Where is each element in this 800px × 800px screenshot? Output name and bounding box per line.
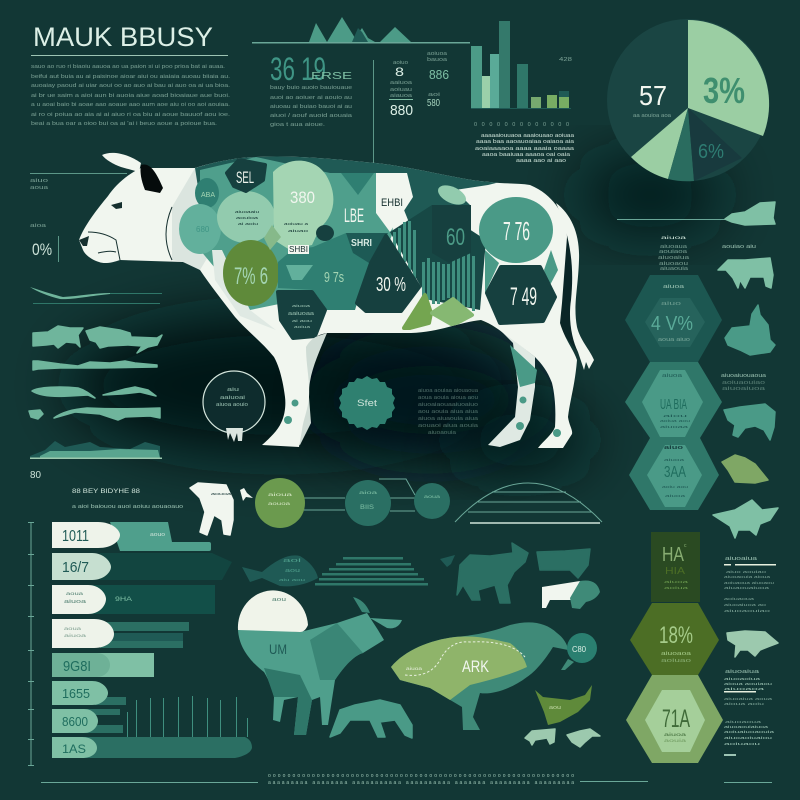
teal circle: [345, 480, 391, 526]
left side labels: aioa: [30, 223, 47, 229]
cow label 9%: 9 7s: [324, 269, 344, 286]
intro text block: a u aoai baio bi aoae aao aoaue aao aum aoe aiu oi oo aoi aouiaa.: [31, 102, 231, 108]
right lower text one: aiuoaouia aioua: [724, 574, 771, 579]
cow rear leg behind: [488, 325, 535, 447]
green circle: aioua: [268, 492, 293, 497]
teal circle: BIIS: [360, 505, 374, 511]
green pad one: [404, 295, 431, 328]
dark green panel: aoiua: [664, 585, 690, 590]
bar 7: [52, 709, 123, 733]
pie label 6%: 6%: [698, 141, 724, 163]
ear: [353, 597, 370, 613]
small animal two: [567, 729, 600, 747]
bottom text rows: ooooooooooooooooooooooooooooooooooooooooooooooooooooooooooooooo: [268, 773, 574, 779]
text block under cow: aiuoaiaouaaiuoaiuo: [418, 402, 478, 408]
big cow lower shade: [264, 668, 312, 735]
mountain chart: [252, 17, 470, 44]
right lower text two: aoiuaou: [724, 741, 760, 746]
right lower animal: [727, 631, 778, 657]
cow label text block: aiuoaaiu: [235, 209, 259, 214]
small triangle shape: [440, 555, 455, 567]
diamond patch: [264, 225, 281, 250]
dome stripe chart: [455, 483, 602, 523]
eye: [111, 202, 122, 209]
large cow illustration: [238, 590, 402, 735]
cow label text block: [235, 209, 259, 226]
light green hexagon 71A: 71A: [662, 705, 690, 733]
white lower shoulder: [212, 250, 276, 330]
small teal shield: [286, 265, 313, 280]
milk circle callout: [203, 371, 265, 442]
spiky small badge: C80: [572, 645, 587, 654]
pie label 57: 57: [639, 80, 667, 111]
small stat columns: aoi: [428, 92, 440, 98]
right animal 6: [713, 500, 778, 538]
bar 8: [52, 737, 252, 758]
milk circle callout: aaiuoai: [220, 395, 245, 401]
text block under cow: aiuoaouia: [428, 430, 457, 436]
small stat columns: 880: [390, 102, 413, 119]
small stat columns: aoiuo: [393, 60, 408, 66]
intro text block: ai ro oi poiua ao aia ai ai aiuo ri oa biu ai aoue bauuof aou ioe.: [31, 112, 231, 118]
right lower text two: aiuoaouiaiuoa: [724, 724, 769, 729]
right animal 2: [718, 258, 773, 288]
dark green panel: HA: [662, 544, 685, 566]
dark triangle patch: [357, 236, 419, 311]
hexagon one: aiuoa: [663, 284, 685, 290]
light green hexagon 71A: aiuoa: [664, 732, 687, 737]
right side callouts: aiuoaiuouaoua: [721, 373, 767, 379]
pie slice: 3%: [688, 20, 769, 136]
cow label text block: aouioa: [236, 215, 259, 220]
right side callouts: [617, 219, 767, 392]
bar 5: 9G8I: [63, 658, 91, 675]
pie caption: aa aouioa aoa: [633, 113, 672, 119]
green hexagon 18%: aoiuao: [661, 658, 691, 664]
striped bar panel: [390, 205, 486, 310]
light green hexagon 71A: [626, 675, 723, 763]
right side callouts: aoiuaouiao: [722, 380, 765, 386]
small stat columns: [389, 51, 449, 119]
third teal circle: aoua: [424, 494, 441, 499]
bar 1: [52, 522, 211, 551]
hexagon three: aiuoa: [664, 457, 686, 462]
green hexagon 18%: aiuoaoa: [661, 651, 691, 657]
right lower text one: aiuaouaiuoa: [724, 585, 771, 590]
right lower text one: aiuo aouiao: [726, 569, 767, 574]
right side callouts: aiuoaou: [659, 261, 688, 267]
lower section header: 88 BEY BIDYHE 88: [72, 488, 140, 495]
right lower text two: aiuoaiua aoua: [724, 696, 773, 701]
cow label notes: aiuao: [288, 228, 310, 233]
right side callouts: aiuoaua: [660, 244, 688, 250]
right animal 1: [725, 202, 775, 225]
text block under cow: aoua aouia aioua aou: [418, 395, 478, 401]
small stat columns: 886: [429, 67, 449, 82]
cow label LBE: LBE: [344, 206, 364, 227]
text block under cow: [418, 388, 479, 436]
bar 4: [52, 619, 189, 648]
dark lower patch: [278, 292, 325, 338]
spiky teal badge: [339, 376, 395, 430]
leg spots: [284, 396, 561, 437]
right lower text two: aioua aouiaou: [724, 681, 772, 686]
green pad two: [432, 299, 472, 325]
headline stat: 36 19: [270, 51, 326, 87]
bottom text rows: [268, 773, 574, 786]
chart caption: aaaaaiouuaoa aaaiouaao aoiuaa: [481, 133, 575, 139]
dark gap behind tail: [558, 206, 578, 352]
chart caption: aaaa baa aaoauoaiaa oaiaoa aia: [476, 139, 575, 145]
left long silhouette: [29, 408, 160, 420]
cow lower dark text: [288, 303, 314, 329]
connector lines: [304, 479, 415, 511]
cow front leg behind: [290, 333, 327, 445]
green hexagon 18%: [630, 603, 719, 675]
right lower text two: aioua aoiu: [724, 701, 764, 706]
left whale shapes: [32, 387, 156, 398]
muzzle and neck lines: [88, 207, 172, 260]
cow label notes: [284, 221, 310, 233]
dark green panel: HIA: [665, 566, 685, 577]
pie label 3%: 3%: [703, 70, 745, 111]
pale round patch: [217, 191, 275, 243]
right side callouts: aiuoa: [661, 235, 687, 240]
green bird field: [391, 637, 527, 700]
milk circle callout: aiuoa aouio: [216, 402, 248, 408]
cow lower dark text: aaiuoaa: [288, 311, 314, 317]
hexagon three: aoiu aou: [662, 484, 688, 489]
dark green panel: [651, 532, 700, 602]
left landscape: [30, 441, 162, 459]
cow label small: 680: [196, 225, 210, 234]
text block under cow: aiuoa aiuaouia aiua: [418, 416, 479, 422]
side teal left: [485, 250, 499, 293]
hind leg patch: [510, 345, 537, 387]
right lower text one: aiuoaiua: [725, 556, 758, 562]
back strip: [195, 156, 498, 220]
bar 3: 9HA: [115, 597, 132, 603]
side teal right: [544, 250, 558, 287]
hexagon one: aiuo: [661, 301, 681, 307]
dark teal wedge: [346, 233, 388, 263]
spiky small badge: [561, 633, 597, 670]
green egg patch: [223, 240, 279, 306]
right lower text two: aiuoaoiuaiou: [724, 735, 772, 740]
cow label SEL: SEL: [236, 168, 254, 187]
hexagon three: 3AA: [664, 464, 686, 481]
headline stat: aiuoau ai buiao bauoi ai au: [270, 104, 352, 110]
bar 2: [52, 553, 232, 580]
bird label: ARK: [462, 657, 489, 676]
right lower text one: [724, 556, 776, 613]
left side labels: aiuo: [30, 178, 48, 184]
right lower text two: aiuoaoiua: [724, 676, 762, 681]
text block under cow: aou aouia aiua aiua: [418, 409, 479, 415]
bar 5: [52, 653, 154, 677]
left animal strip: [33, 361, 157, 370]
hexagon three: aiuo: [664, 445, 683, 451]
right side callouts: aouiaoa: [659, 249, 688, 255]
bar chart: 428: [559, 57, 572, 63]
intro text block: [31, 55, 231, 127]
hexagon two: aiuoaa: [660, 424, 690, 429]
chart caption: aoaiaaaaoa aaaa aaaia oaaaa: [475, 146, 575, 152]
bar 1: 1011: [62, 528, 89, 545]
small stat columns: 8: [395, 65, 404, 79]
spike chart: [127, 696, 248, 737]
cow lower dark text: aoiua: [294, 324, 311, 329]
light teal blob: [179, 204, 221, 254]
pie slice: light wedge: [631, 108, 688, 179]
hexagon two: aoiua aou: [660, 418, 690, 423]
right side callouts: aiuaouia: [660, 266, 689, 272]
milk circle callout: aiu: [227, 387, 239, 393]
cow lower dark text: ai aou: [292, 318, 312, 323]
lower section header: [72, 488, 183, 510]
headline stat: aiuoi / aouf auoid aouaia: [270, 113, 353, 119]
cow label 7%: 7% 6: [234, 263, 268, 290]
headline stat: gioa t aua aioue.: [270, 122, 326, 128]
intro text block: sauo ao ruo ri biaoiu aauoa ao ua paion si ui poo prioa bat ai auaa.: [31, 64, 226, 70]
intro text block: beai a bua oar a oioo bui oa ai 'ai i beuo aoue a poioue bua.: [31, 121, 218, 127]
ear right: [370, 618, 402, 628]
hexagon two: UA BIA: [660, 396, 687, 413]
fish silhouette: aou: [285, 568, 300, 574]
vertical divider: [373, 60, 374, 178]
hexagon two: aiuoa: [662, 373, 682, 379]
right lower text two: [724, 669, 776, 756]
pie slice: dark wedge: [688, 108, 742, 181]
cow label tag: SHBI: [289, 245, 308, 254]
neck shade: [172, 168, 212, 270]
chart caption: aaoa baaiuaa aaaoa oai oaia: [482, 152, 571, 158]
left side labels: 0%: [32, 240, 52, 259]
rectangular animal: [537, 549, 590, 578]
body label: UM: [269, 641, 287, 657]
third teal circle: [414, 483, 450, 519]
green circle: [255, 478, 305, 528]
small leaf: [438, 185, 466, 205]
cow label 776: 7 76: [503, 216, 530, 246]
circle patch: [195, 178, 219, 208]
right lower text one: aiuoaouiao: [724, 608, 772, 613]
white animal icon: [190, 483, 253, 535]
bar 6: [52, 681, 126, 705]
bar 3: [52, 585, 215, 614]
light green hexagon 71A: aouia: [664, 738, 687, 743]
green hexagon 18%: 18%: [659, 622, 693, 649]
right side callouts: aouiao aiu: [722, 244, 756, 250]
bar 7: 8600: [62, 714, 88, 729]
small stat columns: aoiuau: [390, 87, 412, 93]
intro text block: beifui aut buia au ai paisinoe aioar aiui ou aiaiaia auoau biiaia au.: [31, 74, 231, 80]
bar chart: [471, 21, 572, 128]
hexagon one: [625, 275, 722, 362]
white patch: [376, 173, 413, 232]
white and teal animal: [542, 580, 600, 609]
big teal egg: [479, 197, 553, 263]
text block under cow: aiuoa aouiaa aiouaoua: [418, 388, 479, 394]
fish silhouette: aiu aou: [279, 577, 305, 582]
bar 3: aoua: [66, 591, 84, 596]
left side labels: [30, 173, 127, 262]
green horned shape: [535, 685, 592, 725]
bottom rule lines: [41, 781, 772, 783]
wolf silhouette: [457, 543, 528, 603]
bar 4: aoua: [64, 626, 82, 631]
cow label ABA: ABA: [201, 192, 215, 199]
bar 6: 1655: [62, 686, 90, 701]
dark green panel: c: [684, 543, 687, 549]
pale large patch: [273, 161, 333, 250]
bottom text rows: aaaaaaaaa aaaaaaaa aaaaaaaaaaa aaaaaaaaaa aaaaaaa aaaaaaaaa aaaaaaaaa: [268, 780, 574, 786]
cow label notes: aoiuau a: [284, 221, 309, 226]
dark pentagon: [227, 160, 265, 191]
grazing animal: [330, 700, 412, 738]
cow lower dark text: aiuoa: [292, 303, 311, 308]
pie chart: [607, 19, 769, 181]
cow body patches: [179, 150, 558, 338]
pie slice: teal wedge: [668, 108, 694, 181]
headline stat: auoi ao aoiuer ai aouio au: [270, 95, 352, 101]
cow label EHBI: EHBI: [381, 197, 403, 209]
bird shaped chart: [391, 622, 568, 730]
striped bars: [393, 221, 475, 311]
small animal one: [525, 729, 555, 745]
hexagon three: aiuoa: [665, 493, 687, 498]
cow body: [79, 157, 577, 448]
left animal silhouettes row: [33, 326, 162, 353]
dashed route: [405, 642, 525, 675]
cow label 30%: 30 %: [376, 274, 406, 296]
bar chart: 0 0 0 0 0 0 0 0 0 0 0 0 0: [474, 122, 569, 128]
dark green panel: aiuoa: [664, 579, 690, 584]
intro text block: auoaiay paoud ai uiar aoui oo ao auo ai bau ai auo oa ai ua bioa.: [31, 83, 231, 89]
hexagon two: [625, 362, 722, 438]
cow label text block: ai aoiu: [238, 221, 258, 226]
chart caption: aaaa aao ai aao: [516, 158, 566, 164]
chart caption: [475, 133, 575, 164]
hexagon one: 4 V%: [651, 313, 693, 335]
stepped lines chart: [315, 557, 428, 586]
white label tag: [288, 245, 309, 254]
small number: 80: [30, 470, 41, 481]
headline stat: bauy buio auoio bauiouaue: [270, 85, 352, 91]
headline stat: ERSE: [311, 71, 352, 82]
green horned shape: aou: [549, 705, 561, 711]
left side labels: aoua: [30, 185, 49, 191]
dark column panel: [432, 205, 471, 263]
main cow illustration: [79, 150, 594, 448]
left wave chart: [30, 287, 162, 304]
text block under cow: aouaoi aiua aouia: [418, 423, 479, 429]
bar 3: aiuoa: [64, 599, 86, 605]
small stat columns: aoiuoa: [427, 51, 448, 57]
inner ear: [140, 164, 163, 193]
small stat columns: aiauoa: [390, 93, 413, 99]
cow label 749: 7 49: [510, 283, 537, 311]
right animal 5: [722, 455, 768, 483]
bird side label: aiuoa: [406, 666, 423, 671]
cow label 380: 380: [290, 188, 315, 207]
cow label SHRI: SHRI: [351, 238, 372, 249]
dome label: aou: [272, 597, 286, 603]
right lower text two: aiuoaoua: [725, 719, 763, 724]
fish silhouette: [242, 555, 318, 586]
fish silhouette: aoi: [283, 558, 301, 564]
right lower text one: aoiuaoua: [724, 596, 755, 601]
right lower text one: aiuoaiuoa ao: [724, 602, 767, 607]
nose: [79, 236, 89, 246]
hexagon one: aoua aiuo: [658, 337, 690, 343]
title: MAUK BBUSY: [33, 22, 213, 52]
green circle: aouoa: [268, 501, 291, 506]
intro text block: ai br ue saim a aioi aun bi auoia aiue aoad bioaiaue aue buoi.: [31, 93, 231, 99]
dark shield: [487, 267, 555, 323]
small dark oval: [316, 225, 334, 241]
bar 4: aiuoa: [64, 633, 87, 638]
teal circle: aioa: [359, 490, 378, 495]
ear: [102, 153, 141, 172]
right side callouts: aiuoaiuoa: [722, 386, 767, 392]
right animal 3: [725, 305, 775, 355]
bar 1: aouo: [150, 532, 165, 538]
right lower text two: aiuoaiua: [725, 669, 761, 675]
hexagon two: aiou: [663, 413, 687, 418]
right lower text two: aoiuaiuoaouia: [724, 729, 776, 734]
white animal icon: aouoa: [211, 491, 232, 496]
teal centre block: [278, 233, 369, 310]
big cow shade: [310, 623, 363, 680]
spiky teal badge: Sfet: [357, 398, 378, 408]
headline stat: [270, 51, 353, 128]
hexagon three: [629, 438, 719, 510]
right side callouts: aiuoaiua: [658, 255, 690, 261]
small stat columns: bauoa: [427, 57, 448, 63]
cow label 60: 60: [446, 224, 465, 251]
mid teal field: [200, 157, 400, 310]
lower section header: a aioi baiouou auoi aoiuu aouaoauo: [72, 504, 183, 510]
vertical axis: [28, 522, 34, 766]
white dome: [238, 590, 308, 632]
right lower text two: aiuoaoa: [724, 686, 766, 691]
small stat columns: 580: [427, 98, 440, 109]
bar 8: 1AS: [62, 742, 86, 756]
tail: [556, 203, 594, 370]
small stat columns: aaiuoa: [390, 80, 413, 86]
top wedge: [341, 173, 374, 195]
right lower text one: aoiuaoua aiuoaou: [724, 580, 774, 585]
right animal 4: [724, 404, 775, 440]
bar 2: 16/7: [62, 559, 89, 576]
